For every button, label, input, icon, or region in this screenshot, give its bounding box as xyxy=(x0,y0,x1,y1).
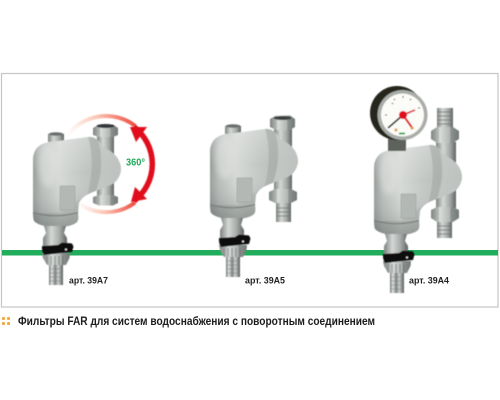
valve 39A4 with gauge xyxy=(370,86,465,293)
valve body xyxy=(207,124,301,277)
valve 39A5 xyxy=(207,116,301,277)
arrow: fading arcs behind valve xyxy=(67,116,135,212)
valve 39A7 with rotation arrow xyxy=(30,116,152,285)
bullet icon: orange dots xyxy=(2,317,10,325)
label 39A4: арт. 39А4 xyxy=(409,276,450,286)
valve body xyxy=(371,140,465,293)
port with nut and thread xyxy=(269,116,297,222)
port with nuts and threads xyxy=(431,108,459,238)
arrow: red double head xyxy=(130,127,152,202)
gauge xyxy=(370,86,428,151)
frame xyxy=(2,74,498,307)
valve body xyxy=(30,132,124,285)
label 39A5: арт. 39А5 xyxy=(245,276,286,286)
caption: Фильтры FAR для систем водоснабжения с поворотным соединением xyxy=(18,314,375,328)
360 degree label: 360° xyxy=(126,158,145,168)
port: threaded pipe and hexes xyxy=(93,124,118,206)
green band xyxy=(2,250,498,256)
label 39A7: арт. 39А7 xyxy=(69,276,108,286)
